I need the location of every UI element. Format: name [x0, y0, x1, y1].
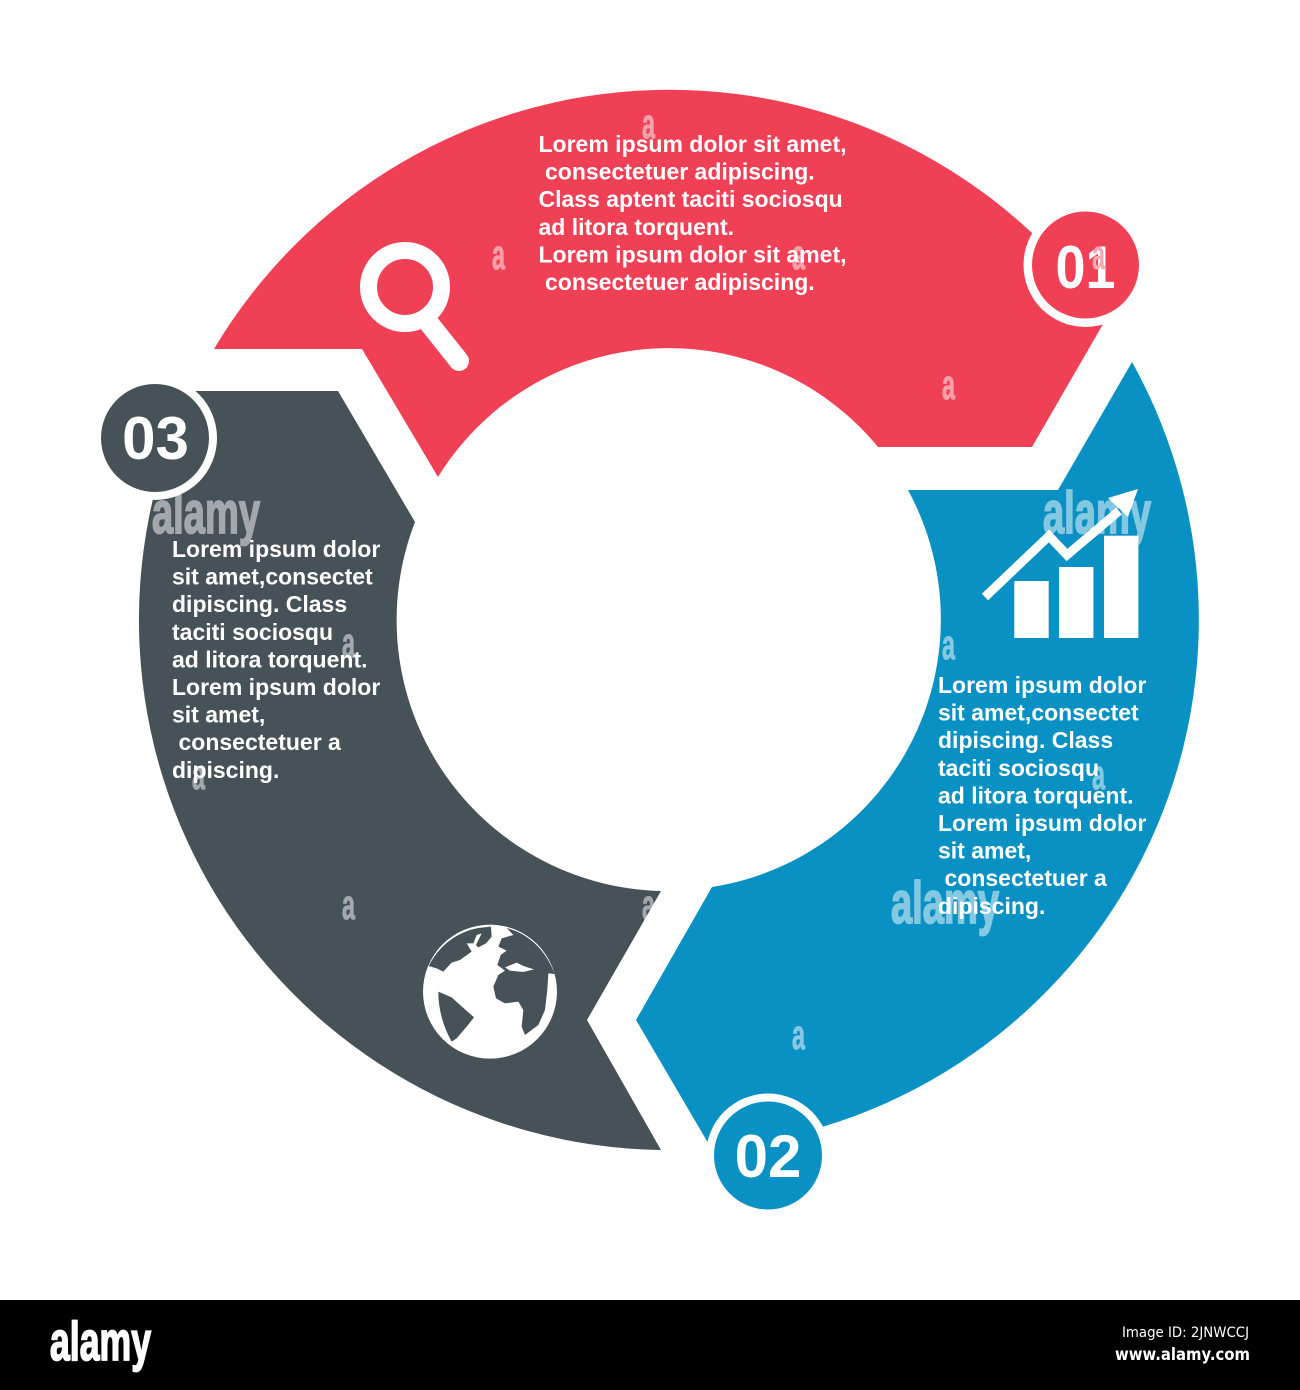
text block: segment 03: taciti sociosqu	[172, 619, 333, 645]
watermarks: a	[642, 881, 655, 928]
badge: 03: 03	[122, 405, 189, 472]
footer bar: www.alamy.com	[1115, 1345, 1250, 1364]
text block: segment 03: sit amet,	[172, 702, 265, 728]
badge: 01: a	[1092, 231, 1105, 278]
watermarks: a	[942, 361, 955, 408]
watermarks: a	[192, 751, 205, 798]
text block: segment 01	[538, 131, 846, 295]
text block: segment 03	[172, 536, 380, 783]
text block: segment 02: dipiscing.	[938, 893, 1045, 919]
text block: segment 03: sit amet,consectet	[172, 564, 373, 590]
watermarks: alamy	[152, 480, 260, 546]
icon: magnifying glass	[368, 250, 459, 361]
text block: segment 03: dipiscing.	[172, 757, 279, 783]
text block: segment 02: sit amet,	[938, 838, 1031, 864]
watermarks: a	[792, 231, 805, 278]
watermarks: a	[792, 1011, 805, 1058]
text block: segment 01: Lorem ipsum dolor sit amet,	[538, 131, 846, 157]
badge: 02: 02	[735, 1123, 801, 1190]
watermarks: alamy	[1043, 480, 1151, 546]
watermarks: a	[642, 100, 655, 147]
text block: segment 02: taciti sociosqu	[938, 755, 1099, 781]
watermarks	[152, 100, 1151, 1058]
text block: segment 02: sit amet,consectet	[938, 700, 1139, 726]
text block: segment 02: Lorem ipsum dolor	[938, 672, 1146, 698]
badge: 02	[706, 1094, 830, 1218]
text block: segment 02: dipiscing. Class	[938, 727, 1113, 753]
text block: segment 03: ad litora torquent.	[172, 646, 368, 672]
text block: segment 01: ad litora torquent.	[538, 214, 734, 240]
badge: 01	[1024, 203, 1148, 327]
footer bar: Image ID: 2JNWCCJ	[1122, 1325, 1249, 1341]
footer bar	[0, 1300, 1300, 1390]
text block: segment 03: dipiscing. Class	[172, 591, 347, 617]
text block: segment 02: Lorem ipsum dolor	[938, 810, 1146, 836]
text block: segment 01: consectetuer adipiscing.	[545, 159, 815, 185]
text block: segment 03: Lorem ipsum dolor	[172, 674, 380, 700]
watermarks: a	[492, 231, 505, 278]
panel: dark grey segment 03	[139, 391, 661, 1150]
icon: growth bar chart with arrow	[985, 489, 1138, 638]
badge: 01: 01	[1056, 234, 1116, 301]
watermarks: a	[1092, 751, 1105, 798]
footer bar: alamy	[50, 1310, 151, 1372]
text block: segment 01: consectetuer adipiscing.	[545, 269, 815, 295]
text block: segment 02	[938, 672, 1146, 919]
text block: segment 01: Lorem ipsum dolor sit amet,	[538, 241, 846, 267]
text block: segment 02: consectetuer a	[944, 865, 1107, 891]
text block: segment 03: Lorem ipsum dolor	[172, 536, 380, 562]
text block: segment 02: ad litora torquent.	[938, 782, 1134, 808]
panel: red segment 01	[214, 90, 1106, 477]
badge: 03	[93, 376, 217, 500]
watermarks: alamy	[891, 870, 999, 936]
watermarks: a	[342, 881, 355, 928]
text block: segment 01: Class aptent taciti sociosqu	[538, 186, 843, 212]
watermarks: a	[942, 621, 955, 668]
watermarks: a	[342, 619, 355, 666]
icon: globe	[423, 925, 557, 1059]
panel: blue segment 02	[636, 362, 1199, 1148]
text block: segment 03: consectetuer a	[178, 729, 341, 755]
